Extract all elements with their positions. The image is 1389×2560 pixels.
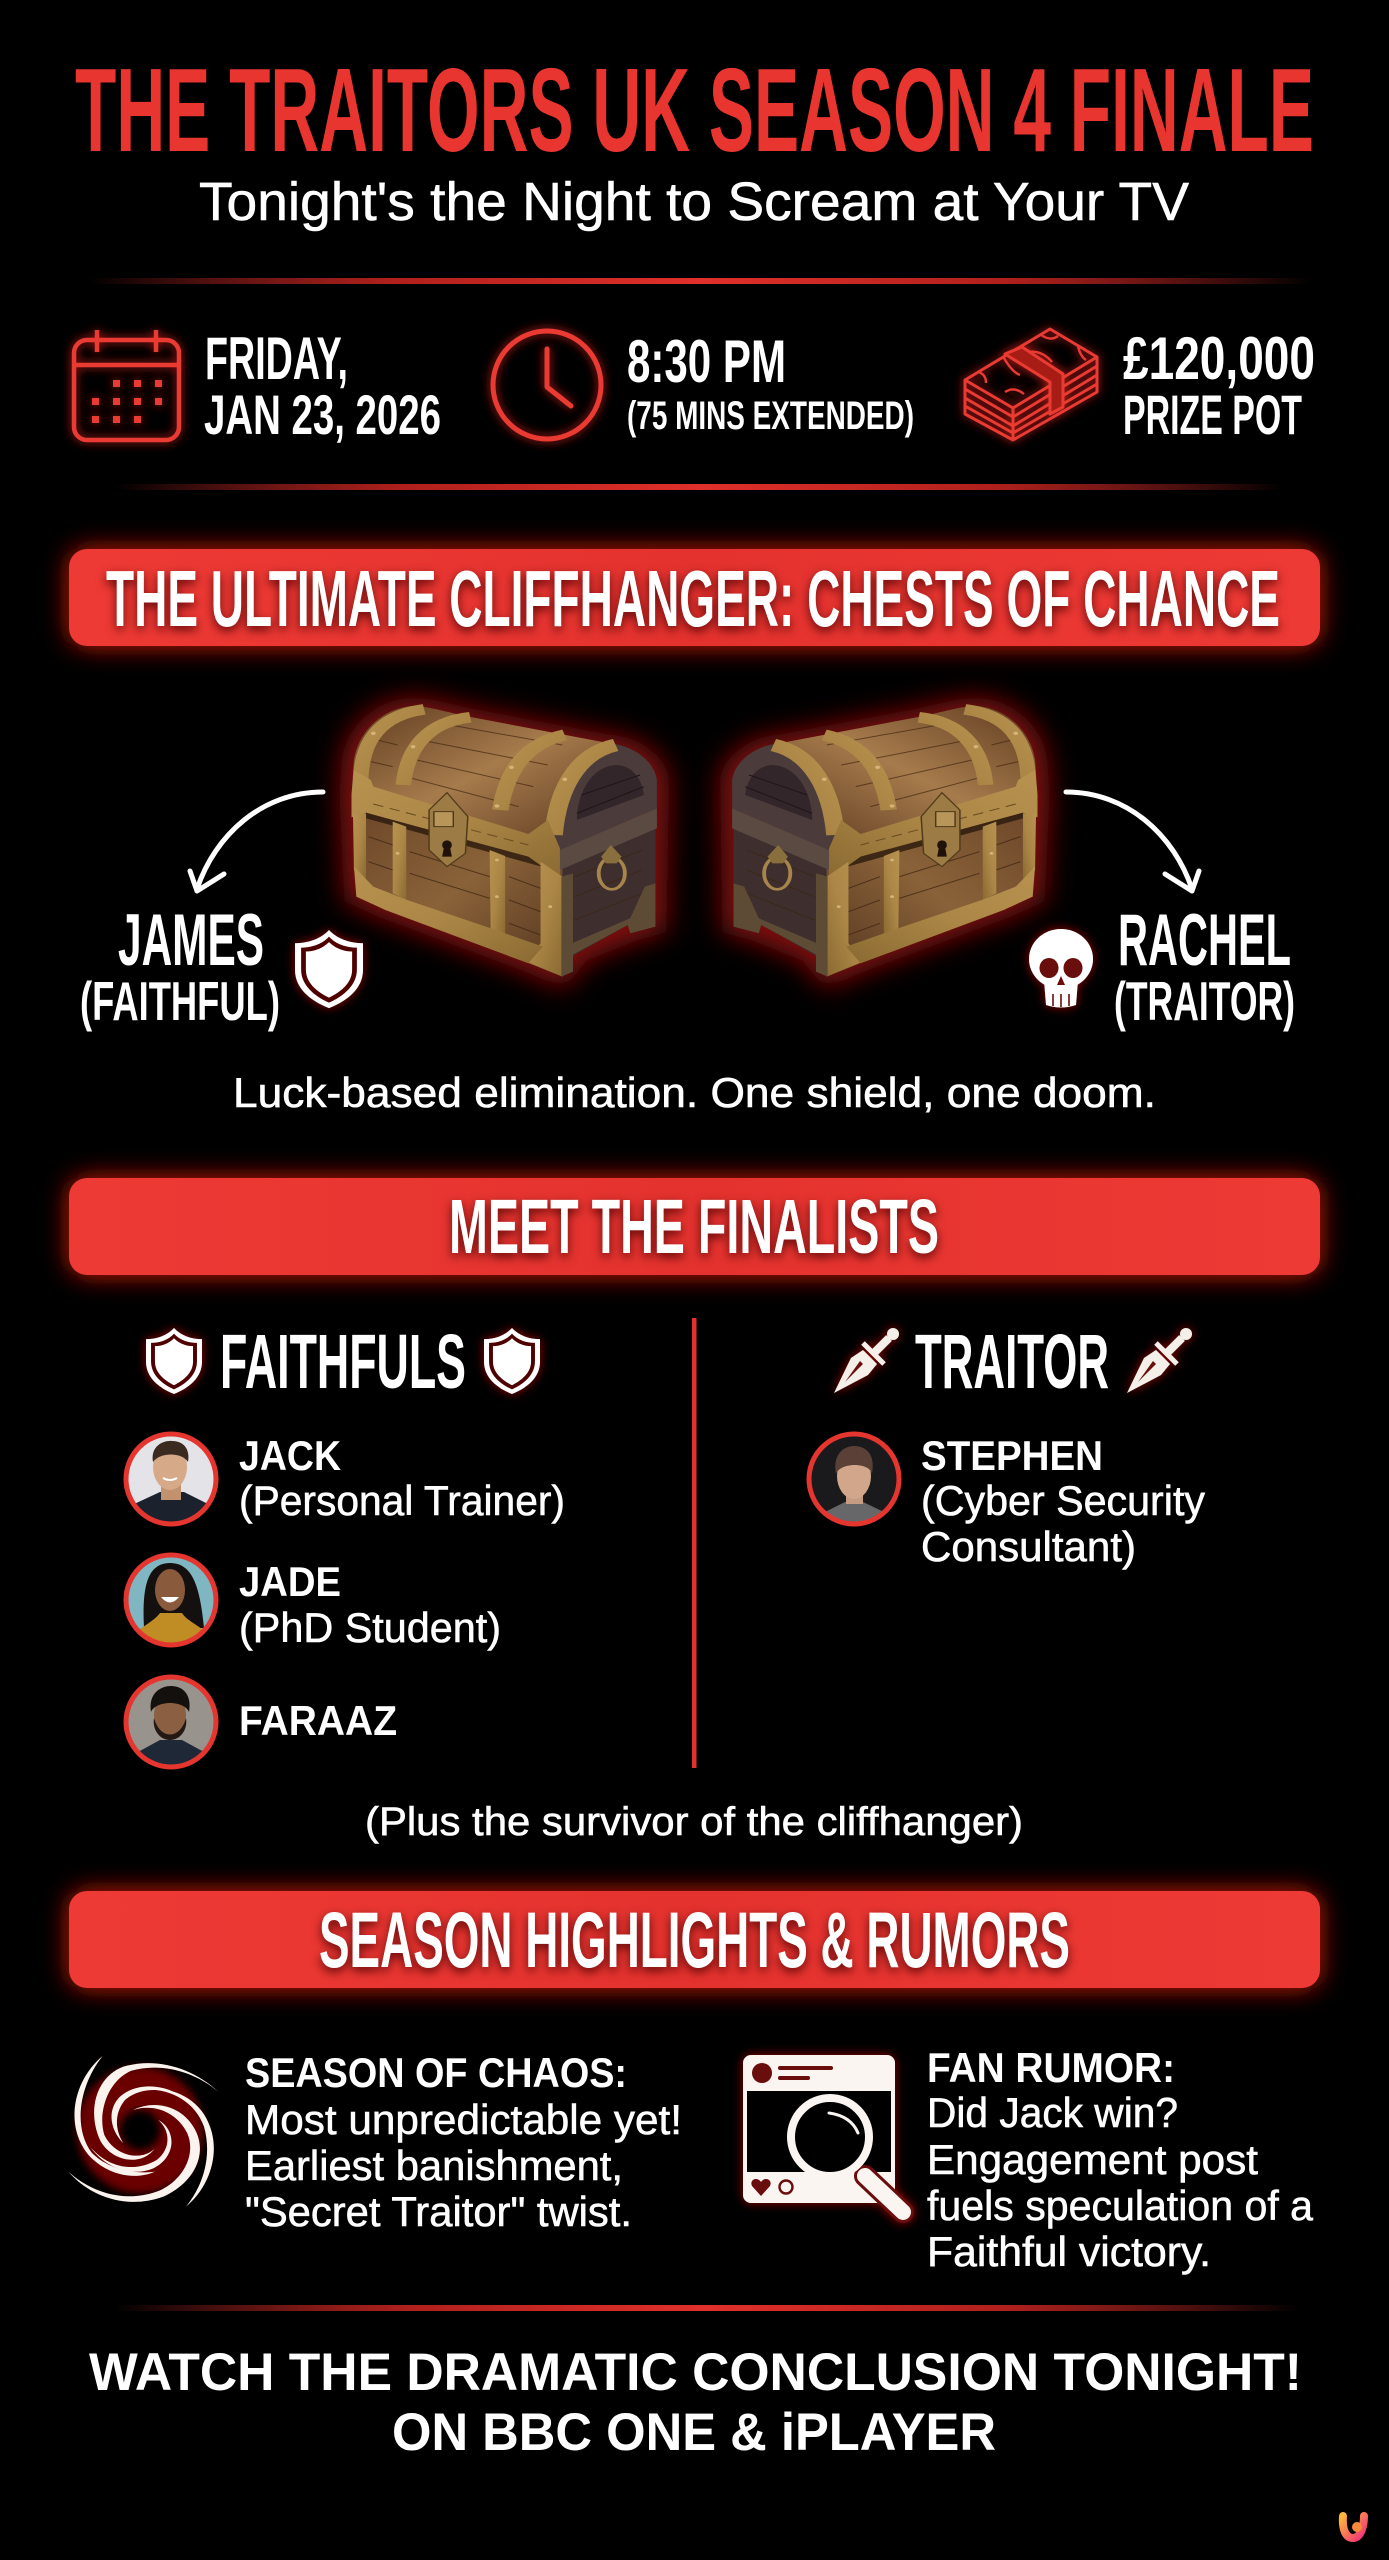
- text: Jade: (PhD Student): [239, 1604, 501, 1651]
- James label: JAMES: [118, 900, 264, 981]
- heading: faithfuls: FAITHFULS: [220, 1319, 466, 1405]
- text: fan rumor: Engagement post: [927, 2136, 1258, 2183]
- text: Stephen: (Cyber Security: [921, 1477, 1205, 1524]
- date text: FRIDAY,: [205, 325, 348, 392]
- text: Jade: JADE: [239, 1558, 341, 1605]
- text: Faraaz: FARAAZ: [239, 1697, 397, 1744]
- call to action: WATCH THE DRAMATIC CONCLUSION TONIGHT!: [89, 2343, 1302, 2402]
- note: survivor: (Plus the survivor of the cliffhanger): [365, 1800, 1023, 1844]
- banner: meet the finalists: MEET THE FINALISTS: [449, 1184, 939, 1270]
- avatar: Stephen: [803, 1430, 903, 1530]
- text: Stephen: [921, 1432, 1205, 1570]
- time text: 8:30 PM: [627, 328, 786, 395]
- arrow: left chest to James: [190, 792, 323, 891]
- icon: social post with magnifier: [743, 2055, 903, 2212]
- banner: meet the finalists: [69, 1178, 1320, 1275]
- avatar: Jade: [120, 1550, 220, 1650]
- text: fan rumor: fuels speculation of a: [927, 2182, 1314, 2229]
- James label: [80, 900, 280, 1032]
- text: season of chaos: "Secret Traitor" twist.: [245, 2188, 632, 2235]
- prize text: £120,000: [1123, 325, 1315, 392]
- text: Stephen: STEPHEN: [921, 1432, 1103, 1479]
- prize text: [1123, 325, 1315, 446]
- call to action: ON BBC ONE & iPLAYER: [392, 2403, 996, 2462]
- date text: JAN 23, 2026: [204, 383, 441, 446]
- caption: luck-based elimination: Luck-based elimination. One shield, one doom.: [233, 1069, 1156, 1116]
- time text: (75 MINS EXTENDED): [627, 394, 914, 438]
- call to action: [89, 2343, 1302, 2462]
- date text: [204, 325, 441, 446]
- chest: right: [732, 706, 1037, 977]
- text: fan rumor: FAN RUMOR:: [927, 2044, 1175, 2091]
- arrow: right chest to Rachel: [1066, 792, 1199, 891]
- column divider: [692, 1318, 696, 1768]
- text: season of chaos: [245, 2049, 682, 2235]
- text: season of chaos: Most unpredictable yet!: [245, 2096, 682, 2143]
- icon: clock: [493, 331, 601, 439]
- text: season of chaos: Earliest banishment,: [245, 2142, 623, 2189]
- text: Stephen: Consultant): [921, 1523, 1136, 1570]
- text: Jack: JACK: [239, 1432, 341, 1479]
- text: Jack: (Personal Trainer): [239, 1477, 565, 1524]
- text: fan rumor: [927, 2044, 1314, 2275]
- icon: watermark logo: [1343, 2516, 1364, 2538]
- avatar: Jack: [120, 1430, 220, 1530]
- icon: skull: [1029, 929, 1093, 1008]
- icon: shield: [295, 930, 363, 1008]
- icon: money stack: [965, 329, 1097, 440]
- text: season of chaos: SEASON OF CHAOS:: [245, 2049, 627, 2096]
- avatar: Faraaz: [120, 1672, 220, 1772]
- heading: traitor: [834, 1319, 1192, 1405]
- banner: season highlights: [69, 1891, 1320, 1988]
- icon: chaos spiral: [68, 2056, 218, 2207]
- icon: calendar: [74, 330, 179, 440]
- heading: faithfuls: [146, 1319, 540, 1405]
- Rachel label: [1114, 900, 1295, 1032]
- James label: (FAITHFUL): [80, 970, 280, 1032]
- text: Jade: [239, 1558, 501, 1651]
- chest: left: [352, 706, 657, 977]
- text: fan rumor: Did Jack win?: [927, 2089, 1178, 2136]
- Rachel label: (TRAITOR): [1114, 970, 1295, 1032]
- subtitle: Tonight's the Night to Scream at Your TV: [199, 172, 1189, 232]
- text: fan rumor: Faithful victory.: [927, 2228, 1211, 2275]
- time text: [627, 328, 914, 438]
- heading: traitor: TRAITOR: [915, 1319, 1109, 1405]
- text: Jack: [239, 1432, 565, 1524]
